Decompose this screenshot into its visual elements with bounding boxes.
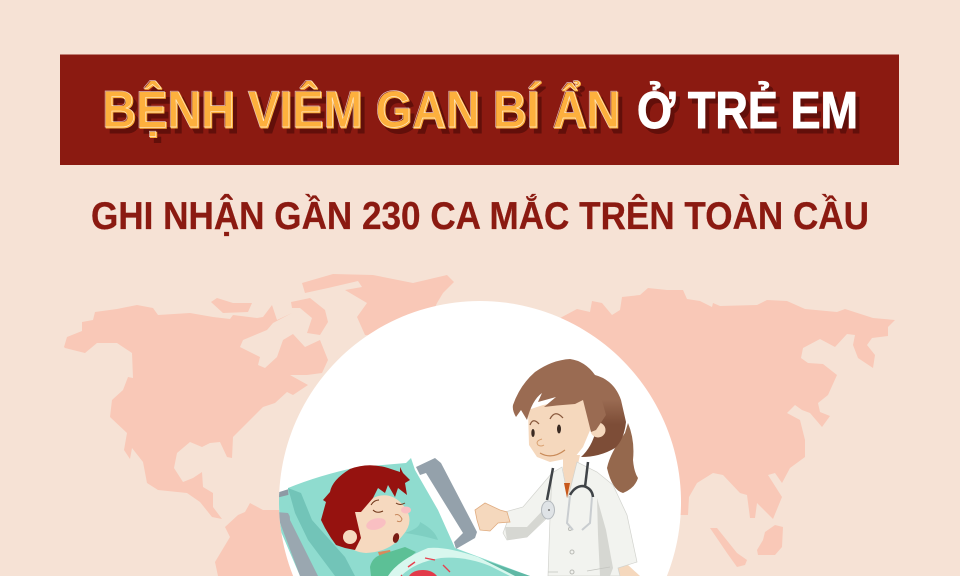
boy eyes (371, 500, 405, 512)
title banner (60, 54, 899, 165)
borneo (757, 525, 783, 555)
bed left frame (279, 512, 318, 576)
doctor face (528, 398, 591, 462)
doctor eyes (531, 424, 561, 437)
doctor lower hand (618, 565, 640, 576)
doctor neck (563, 455, 580, 500)
boy ear (343, 530, 357, 544)
north america (64, 305, 328, 519)
illustration: doctor (475, 359, 640, 576)
banner background (60, 54, 899, 165)
eurasia (540, 288, 895, 519)
title white text: Ở TRẺ EM (637, 81, 858, 140)
subtitle: GHI NHẬN GẦN 230 CA MẮC TRÊN TOÀN CẦU (91, 194, 869, 238)
doctor ear (590, 422, 606, 438)
boy cheeks (365, 506, 411, 532)
orange shirt (564, 483, 570, 498)
boy hair (321, 465, 410, 550)
arctic island (211, 298, 252, 313)
white circle behind illustration (279, 301, 681, 576)
liver dashed outline (401, 558, 450, 576)
coat shading (597, 498, 613, 576)
doctor hair (513, 359, 606, 432)
greenland (302, 274, 454, 340)
blanket lower (401, 558, 510, 576)
blanket light band (388, 548, 515, 576)
hair back (581, 375, 626, 457)
doctor smile (540, 450, 565, 456)
doctor hand (475, 503, 510, 531)
coat sleeve (503, 473, 552, 540)
infographic canvas (60, 54, 899, 576)
ponytail (607, 423, 638, 493)
doctor nose (537, 439, 544, 446)
pillow (288, 458, 530, 576)
mattress edge (279, 494, 300, 576)
boy neck (378, 550, 390, 556)
illustration: boy in hospital bed (276, 458, 530, 576)
coat pockets (548, 567, 610, 572)
boy shirt (370, 547, 416, 576)
boy nose (395, 514, 402, 522)
sumatra (710, 528, 747, 567)
south america (215, 503, 320, 576)
title highlighted text: BỆNH VIÊM GAN BÍ ẨN (103, 81, 621, 140)
baffin island (291, 298, 328, 335)
pillow fold (288, 488, 355, 576)
pillow shadow (405, 522, 438, 540)
stethoscope (542, 462, 593, 530)
boy face (350, 495, 410, 553)
bed headboard (416, 458, 477, 549)
blanket edge (483, 560, 530, 576)
world map (64, 274, 895, 576)
liver icon (409, 570, 437, 576)
lab coat body (548, 462, 637, 576)
doctor brows (530, 414, 563, 425)
bed top rail (279, 489, 288, 498)
boy mouth (392, 533, 400, 543)
sleeve shading (505, 512, 545, 540)
title highlighted outline: BỆNH VIÊM GAN BÍ ẨN (102, 80, 620, 139)
coat buttons (568, 528, 574, 574)
